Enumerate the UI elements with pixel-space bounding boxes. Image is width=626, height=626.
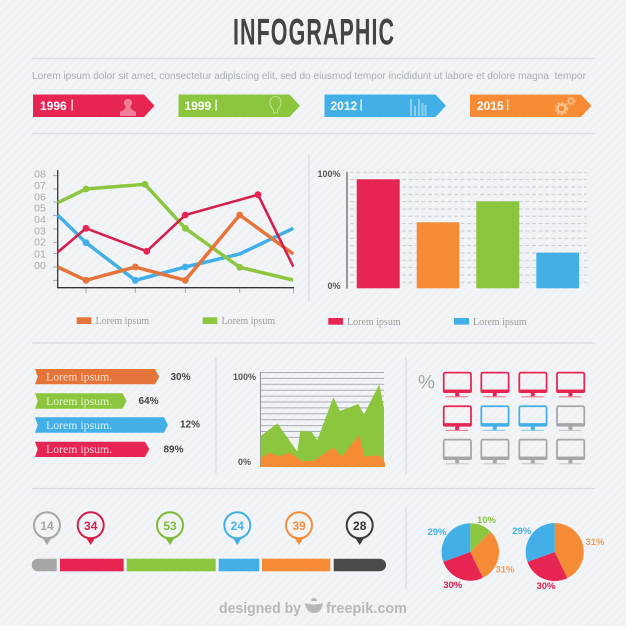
pie chart 2 — [512, 523, 605, 592]
timeline ribbon: 2012 — [324, 94, 446, 117]
legend: bar chart blue: Lorem ipsum — [473, 317, 527, 328]
pin: 53 — [157, 512, 183, 545]
progress ribbon: red 89%: Lorem ipsum. — [46, 442, 112, 456]
pie chart 1 — [427, 515, 515, 591]
progress ribbon: orange 30%: Lorem ipsum. — [46, 370, 112, 384]
series: red — [58, 191, 293, 267]
pin: 39 — [286, 512, 312, 545]
monitor 1 — [443, 373, 472, 397]
icon: bar chart — [410, 99, 426, 116]
series: blue — [58, 215, 293, 284]
axis labels: 100% — [233, 372, 256, 382]
progress ribbon: blue 12% — [35, 417, 200, 433]
area: green — [261, 384, 384, 467]
y axis labels: 00 — [34, 260, 46, 272]
axis labels: 0% — [238, 457, 251, 467]
monitor 6 — [481, 406, 509, 431]
bar chart — [317, 169, 587, 291]
pin: 14: 14 — [40, 519, 54, 533]
progress ribbon: red 89% — [35, 442, 184, 457]
pin: 28: 28 — [353, 519, 367, 533]
monitor 10 — [481, 440, 509, 464]
icon: person — [120, 99, 136, 116]
pie labels: 30% — [443, 580, 463, 591]
area chart — [233, 372, 385, 467]
y axis labels: 04 — [34, 214, 46, 226]
pin: 24: 24 — [231, 519, 244, 533]
timeline ribbon: 1996: 1996 — [40, 99, 67, 113]
icon grid: monitors — [443, 373, 585, 464]
segmented bar — [32, 559, 386, 571]
percent sign: % — [418, 372, 435, 394]
pin: 34 — [78, 512, 104, 545]
monitor 3 — [519, 373, 547, 397]
timeline ribbon: 2015 — [470, 94, 592, 117]
pin: 34: 34 — [84, 519, 98, 533]
legend: line chart orange: Lorem ipsum — [96, 316, 149, 327]
y axis labels — [34, 168, 46, 272]
pie labels — [512, 526, 605, 592]
y axis labels: 08 — [34, 168, 46, 180]
monitor 9 — [443, 440, 472, 464]
timeline ribbon: 1999 — [178, 94, 300, 117]
axis labels — [233, 372, 256, 467]
progress ribbon: orange 30%: 30% — [170, 372, 191, 383]
pin: 39: 39 — [292, 519, 306, 533]
bars — [357, 179, 579, 288]
pin: 53: 53 — [163, 519, 177, 533]
progress ribbon: green 64%: 64% — [138, 396, 159, 407]
footer credit: designed by — [219, 600, 302, 617]
pin: 24 — [224, 512, 250, 545]
footer credit — [219, 598, 407, 617]
icon: light bulb — [270, 96, 281, 113]
monitor 12 — [556, 440, 585, 464]
monitor 11 — [519, 440, 547, 464]
timeline ribbon: 2015: 2015 — [477, 99, 504, 113]
series: green — [58, 181, 293, 280]
title: INFOGRAPHIC — [233, 13, 394, 53]
area: orange — [261, 435, 385, 467]
y axis labels: 03 — [34, 226, 46, 238]
y axis labels: 05 — [34, 202, 46, 214]
pie labels: 31% — [495, 564, 515, 576]
monitor 2 — [481, 373, 509, 397]
progress ribbon: green 64%: Lorem ipsum. — [46, 394, 112, 408]
intro text: Lorem ipsum dolor sit amet, consectetur adipiscing elit, sed do eiusmod tempor incididunt ut labore et dolore magna tempor — [32, 71, 587, 82]
footer credit: freepik.com — [326, 600, 407, 617]
y axis labels: 01 — [34, 248, 46, 260]
y axis labels: 06 — [34, 191, 46, 203]
pie labels: 30% — [536, 581, 556, 592]
monitor 5 — [443, 406, 472, 431]
axis labels: 0% — [327, 281, 340, 291]
progress ribbon: green 64% — [35, 393, 159, 409]
progress ribbon: red 89%: 89% — [164, 444, 184, 456]
monitor 8 — [556, 406, 585, 431]
icon: gears — [556, 97, 575, 114]
timeline ribbon: 2012: 2012 — [330, 99, 358, 113]
axis labels — [317, 169, 340, 291]
axis labels: 100% — [317, 169, 340, 179]
timeline ribbon: 1996 — [33, 94, 154, 117]
progress ribbon: blue 12%: 12% — [180, 420, 200, 430]
series: orange — [58, 212, 293, 284]
legend: line chart green: Lorem ipsum — [222, 316, 275, 327]
pie labels: 31% — [585, 537, 605, 548]
pie labels: 29% — [512, 526, 532, 537]
legend: bar chart red: Lorem ipsum — [347, 317, 401, 328]
pin: 14 — [34, 512, 60, 545]
pie labels: 10% — [477, 515, 497, 526]
y axis labels: 02 — [34, 236, 46, 248]
monitor 4 — [556, 373, 585, 397]
pin: 28 — [347, 512, 373, 545]
y axis labels: 07 — [34, 180, 46, 192]
monitor 7 — [519, 406, 547, 431]
pie labels — [427, 515, 515, 591]
progress ribbon: blue 12%: Lorem ipsum. — [46, 418, 112, 432]
icon: freepik logo — [305, 598, 323, 613]
timeline ribbon: 1999: 1999 — [184, 99, 212, 113]
progress ribbon: orange 30% — [35, 369, 191, 384]
pie labels: 29% — [427, 527, 447, 538]
line chart — [34, 168, 294, 293]
